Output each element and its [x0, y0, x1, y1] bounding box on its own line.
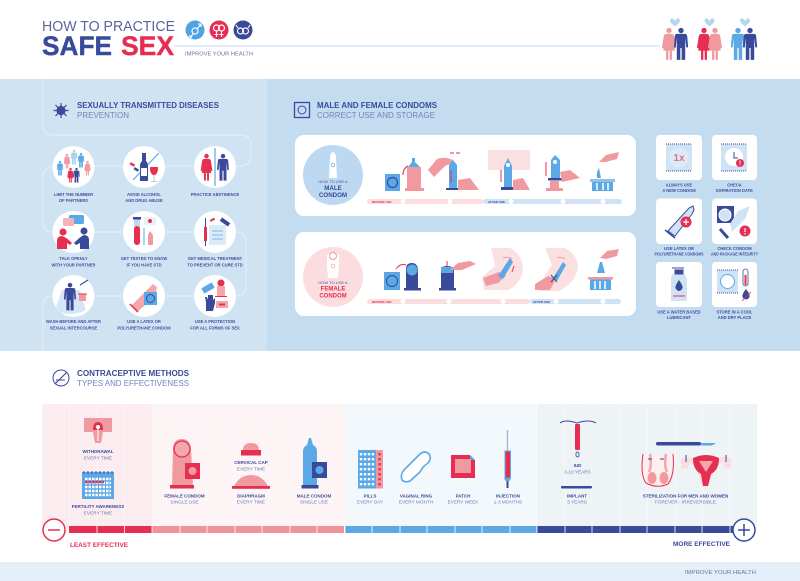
step 1 [385, 158, 424, 191]
item: medical treatment [187, 211, 243, 268]
white header curve [0, 0, 800, 79]
item: wash: SEXUAL INTERCOURSE [50, 326, 97, 330]
male badge [303, 145, 363, 205]
method: pills: PILLS [364, 494, 376, 498]
icon: virus [54, 103, 68, 118]
female badge: FEMALE [321, 286, 345, 292]
item: use condom: POLYURETHANE CONDOM [117, 326, 171, 330]
item: talk openly [52, 211, 96, 268]
method: cervical cap [234, 443, 268, 472]
heading: contraceptive: TYPES AND EFFECTIVENESS [77, 379, 189, 388]
method: injection: 1-3 MONTHS [494, 500, 522, 504]
tip: integrity: CHECK CONDOM [717, 246, 752, 251]
panel: male condom [295, 135, 636, 216]
item: use condom [117, 275, 171, 330]
step 5 [588, 249, 619, 290]
method: pills: EVERY DAY [357, 500, 384, 504]
panel: condom tips [654, 135, 758, 320]
item: medical treatment: TO PREVENT OR CURE STD [187, 262, 243, 268]
tip: integrity: AND PACKAGE INTEGRITY [711, 252, 758, 256]
method: IUD [560, 421, 596, 474]
step 4 [535, 248, 578, 291]
item: limit partners: LIMIT THE NUMBER [54, 192, 93, 197]
method: withdrawal: EVERY TIME [84, 456, 112, 460]
method: male condom: SINGLE USE [300, 500, 328, 504]
panel: prevention grid [46, 146, 243, 330]
method: fertility awareness [72, 471, 124, 516]
method: pills [357, 450, 384, 504]
item: protection [190, 275, 240, 330]
footer band [0, 562, 800, 581]
method: female condom: FEMALE CONDOM [164, 494, 205, 498]
title: SAFE [42, 31, 112, 61]
method: injection: INJECTION [496, 494, 520, 498]
item: get tested: GET TESTED TO KNOW [121, 256, 167, 261]
plus button [733, 519, 755, 541]
progress bar [367, 299, 621, 304]
item: get tested [121, 211, 167, 268]
method: sterilization [642, 442, 731, 504]
method: diaphragm [232, 475, 270, 504]
tip: expiration [712, 135, 757, 193]
least effective label: LEAST EFFECTIVE [70, 542, 129, 549]
item: avoid alcohol [123, 146, 165, 203]
item: medical treatment: GET MEDICAL TREATMENT [188, 256, 243, 261]
method: IUD: 3-10 YEARS [564, 470, 591, 474]
item: abstinence: PRACTICE ABSTINENCE [191, 192, 240, 197]
progress bar: AFTER USE [533, 300, 550, 304]
minus button [43, 519, 65, 541]
item: use condom: USE A LATEX OR [127, 319, 161, 324]
more effective label: MORE EFFECTIVE [673, 541, 731, 548]
method: withdrawal: WITHDRAWAL [82, 449, 114, 454]
method: implant: 3 YEARS [567, 500, 587, 504]
item: talk openly: WITH YOUR PARTNER [52, 262, 96, 268]
item: protection: FOR ALL FORMS OF SEX [190, 326, 240, 330]
method: vaginal ring [399, 452, 433, 504]
icon: gender symbols [186, 20, 252, 40]
progress bar [367, 199, 622, 204]
male badge: MALE [324, 185, 342, 192]
heading: condoms [317, 101, 438, 120]
method: vaginal ring: VAGINAL RING [400, 494, 433, 498]
method: diaphragm: DIAPHRAGM [237, 494, 265, 498]
tip: one time: 1x [673, 153, 685, 164]
item: avoid alcohol: AND DRUG ABUSE [125, 198, 163, 203]
female badge: CONDOM [319, 294, 347, 300]
method: female condom: SINGLE USE [170, 500, 199, 504]
icon: condom packet [294, 102, 310, 118]
item: talk openly: TALK OPENLY [59, 256, 88, 261]
method: patch: PATCH [456, 494, 470, 498]
method: female condom [164, 439, 205, 504]
heading: condoms: MALE AND FEMALE CONDOMS [317, 101, 438, 110]
step 2 [428, 153, 479, 190]
background: blue main band [0, 79, 800, 351]
tip: storage: STORE IN A COOL [716, 310, 753, 314]
male badge: HOW TO USE A [318, 179, 348, 184]
title: HOW TO PRACTICE [42, 19, 175, 35]
method: sterilization: STERILIZATION FOR MEN AND WOMEN [643, 494, 728, 498]
method: cervical cap: EVERY TIME [237, 466, 265, 472]
tip: lubricant [656, 262, 702, 320]
tip: one time [656, 135, 702, 193]
method: withdrawal [82, 418, 114, 460]
female badge: HOW TO USE A [318, 280, 348, 285]
method: sterilization: FOREVER - IRREVERSIBLE [655, 500, 716, 504]
connector path [43, 79, 251, 351]
item: wash [46, 275, 101, 330]
heading: STD: PREVENTION [77, 111, 129, 120]
progress bar: BEFORE USE [372, 300, 392, 304]
header line [174, 45, 660, 47]
heading: STD [77, 101, 220, 120]
tip: expiration: CHECK [727, 182, 742, 188]
tip: storage: AND DRY PLACE [718, 315, 751, 320]
chart: effectiveness timeline [42, 404, 757, 549]
heading: contraceptive: CONTRACEPTIVE METHODS [77, 369, 190, 378]
tip: integrity [711, 198, 758, 256]
step 4 [546, 155, 580, 191]
progress bar: AFTER USE [488, 200, 505, 204]
method: implant [561, 486, 592, 504]
tip: expiration: EXPIRATION DATE [716, 188, 753, 193]
tip: storage [712, 262, 757, 320]
progress bar: BEFORE USE [372, 200, 392, 204]
method: patch [448, 455, 479, 504]
title: SEX [121, 31, 174, 61]
method: male condom [297, 438, 331, 504]
panel: female condom [295, 232, 636, 316]
method: male condom: MALE CONDOM [297, 494, 331, 498]
female badge [303, 247, 363, 307]
tip: one time: A NEW CONDOM [662, 188, 696, 193]
item: protection: USE A PROTECTION [195, 319, 235, 324]
method: injection [494, 430, 522, 504]
icon: couples [662, 18, 757, 60]
method: fertility awareness: EVERY TIME [84, 510, 112, 516]
step 2 [439, 261, 476, 290]
tagline: IMPROVE YOUR HEALTH [185, 52, 253, 58]
method: fertility awareness: FERTILITY AWARENESS [72, 504, 124, 509]
item: limit partners: OF PARTNERS [59, 198, 88, 203]
tip: one time: ALWAYS USE [666, 182, 692, 188]
step 3 [482, 248, 523, 290]
heading: condoms: CORRECT USE AND STORAGE [317, 111, 435, 120]
item: get tested: IF YOU HAVE STD [126, 262, 162, 268]
step 1 [384, 263, 421, 290]
item: limit partners [52, 146, 94, 203]
male badge: CONDOM [319, 192, 347, 199]
tip: lubricant: LUBRICANT [667, 315, 691, 320]
method: IUD: IUD [574, 463, 582, 468]
heading: contraceptive [77, 369, 190, 388]
item: avoid alcohol: AVOID ALCOHOL [127, 192, 161, 197]
method: diaphragm: EVERY TIME [237, 500, 265, 504]
tip: latex: USE LATEX OR [664, 246, 694, 251]
bar segments [69, 526, 734, 533]
method: vaginal ring: EVERY MONTH [399, 500, 433, 504]
heading: STD: SEXUALLY TRANSMITTED DISEASES [77, 101, 220, 110]
icon: no contraceptive [53, 370, 69, 386]
tip: latex: POLYURETHANE CONDOMS [654, 252, 704, 256]
step 3 [488, 150, 530, 190]
item: wash: WASH BEFORE AND AFTER [46, 319, 101, 324]
tip: latex [654, 198, 704, 256]
method: patch: EVERY WEEK [448, 500, 479, 504]
zone backgrounds [42, 404, 757, 526]
title [42, 19, 175, 61]
step 5 [590, 152, 619, 191]
method: cervical cap: CERVICAL CAP [234, 460, 268, 465]
footer text: IMPROVE YOUR HEALTH [685, 570, 756, 576]
method: implant: IMPLANT [567, 494, 587, 498]
panel: STD prevention background [0, 79, 267, 351]
tip: lubricant: USE A WATER BASED [657, 310, 701, 314]
item: abstinence [191, 146, 240, 197]
